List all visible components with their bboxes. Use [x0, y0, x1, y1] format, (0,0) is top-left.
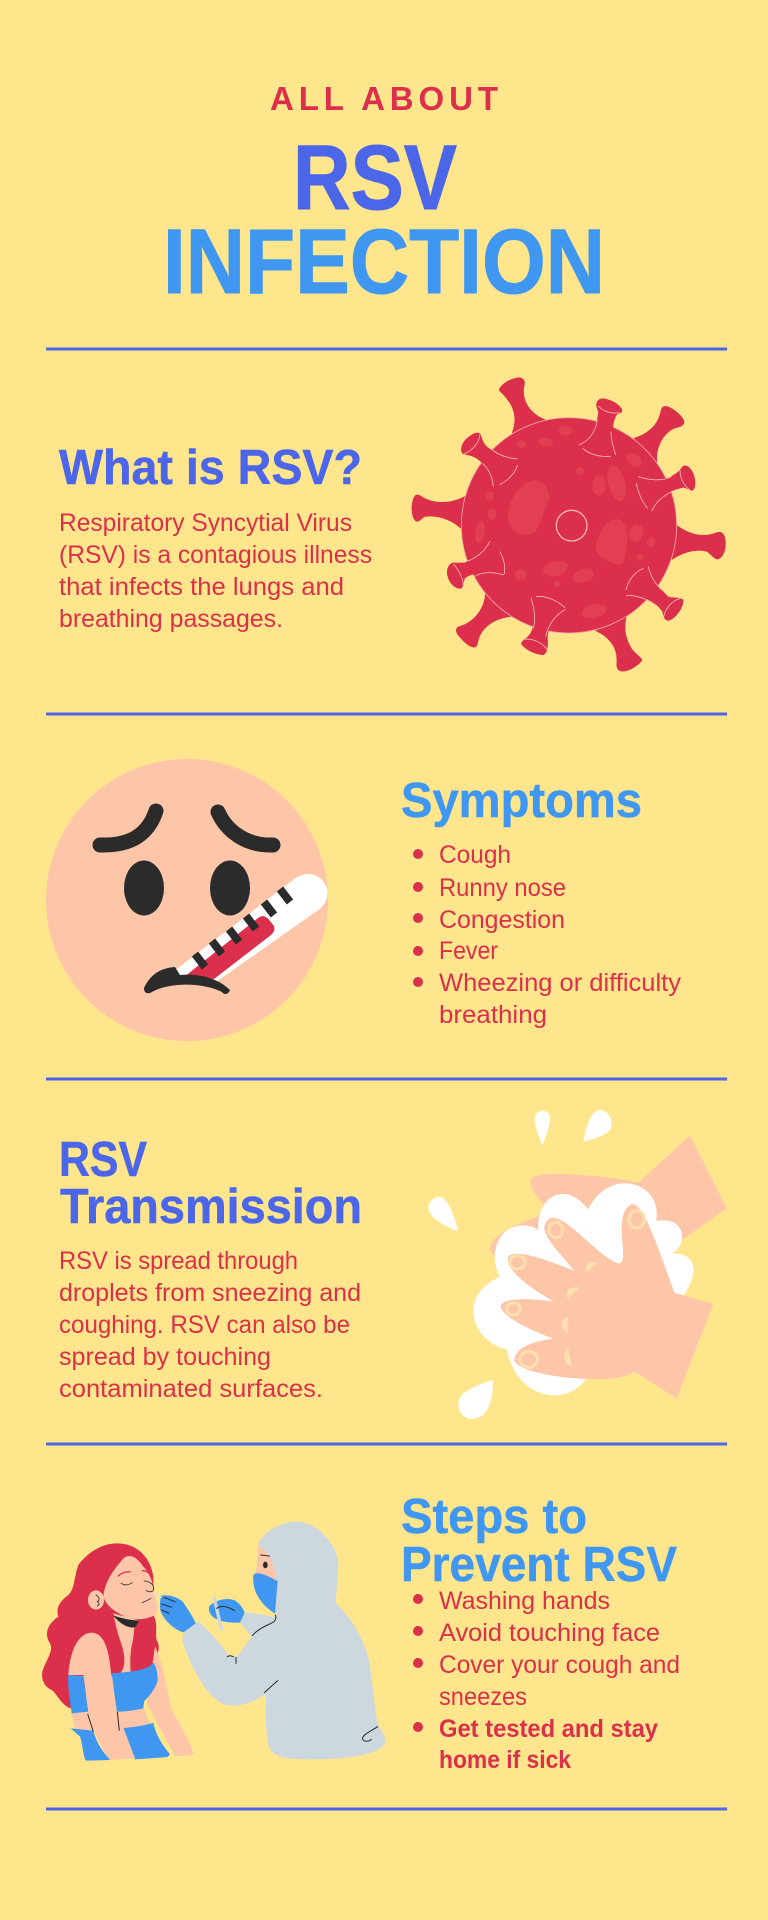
- list: symptoms: Wheezing or difficulty: [439, 969, 681, 997]
- heading: steps to prevent RSV: Steps to: [401, 1490, 587, 1544]
- panel: prevention: [42, 1490, 680, 1774]
- text block: how RSV spreads: droplets from sneezing and: [59, 1279, 361, 1307]
- text block: how RSV spreads: spread by touching: [59, 1343, 271, 1371]
- list: symptoms: Congestion: [439, 906, 565, 934]
- figure: health worker: [152, 1522, 386, 1759]
- list: prevention steps: [413, 1587, 680, 1774]
- title: [163, 80, 605, 313]
- heading: steps to prevent RSV: Prevent RSV: [401, 1538, 677, 1592]
- title kicker: all about: ALL ABOUT: [270, 80, 498, 117]
- list: prevention steps: home if sick: [439, 1746, 571, 1774]
- list: symptoms: Cough: [439, 841, 511, 869]
- panel: transmission: [59, 1110, 727, 1419]
- icon: virus: [412, 377, 726, 672]
- heading: what is RSV: What is RSV?: [59, 441, 362, 495]
- list: symptoms: breathing: [439, 1001, 547, 1029]
- text block: RSV definition: that infects the lungs and: [59, 573, 344, 601]
- list: prevention steps: Avoid touching face: [439, 1619, 660, 1647]
- heading: RSV transmission: RSV: [59, 1133, 147, 1187]
- figure: patient: [42, 1543, 194, 1761]
- icon: nasal swab test: [42, 1522, 386, 1761]
- title line: RSV: RSV: [293, 127, 457, 229]
- title line: infection: INFECTION: [163, 211, 605, 313]
- text block: RSV definition: breathing passages.: [59, 605, 283, 633]
- icon: hand washing: [428, 1110, 727, 1419]
- heading: RSV transmission: Transmission: [60, 1180, 362, 1234]
- list: symptoms: Runny nose: [439, 874, 566, 902]
- panel: what is RSV: [59, 377, 726, 672]
- text block: RSV definition: (RSV) is a contagious illness: [59, 541, 372, 569]
- text block: how RSV spreads: contaminated surfaces.: [59, 1375, 323, 1403]
- text block: how RSV spreads: [59, 1247, 361, 1403]
- text block: RSV definition: [59, 509, 372, 633]
- heading: RSV transmission: [59, 1133, 362, 1234]
- heading: steps to prevent RSV: [401, 1490, 677, 1592]
- list: prevention steps: Washing hands: [439, 1587, 610, 1615]
- text block: how RSV spreads: coughing. RSV can also be: [59, 1311, 350, 1339]
- list: symptoms: Fever: [439, 937, 498, 965]
- icon: sick face with thermometer: [46, 759, 328, 1041]
- text block: RSV definition: Respiratory Syncytial Virus: [59, 509, 352, 537]
- text block: how RSV spreads: RSV is spread through: [59, 1247, 298, 1275]
- heading: symptoms: Symptoms: [401, 774, 642, 828]
- list: prevention steps: sneezes: [439, 1683, 527, 1711]
- panel: symptoms: [46, 759, 681, 1041]
- list: symptoms: [413, 841, 681, 1029]
- list: prevention steps: Get tested and stay: [439, 1715, 658, 1743]
- list: prevention steps: Cover your cough and: [439, 1651, 680, 1679]
